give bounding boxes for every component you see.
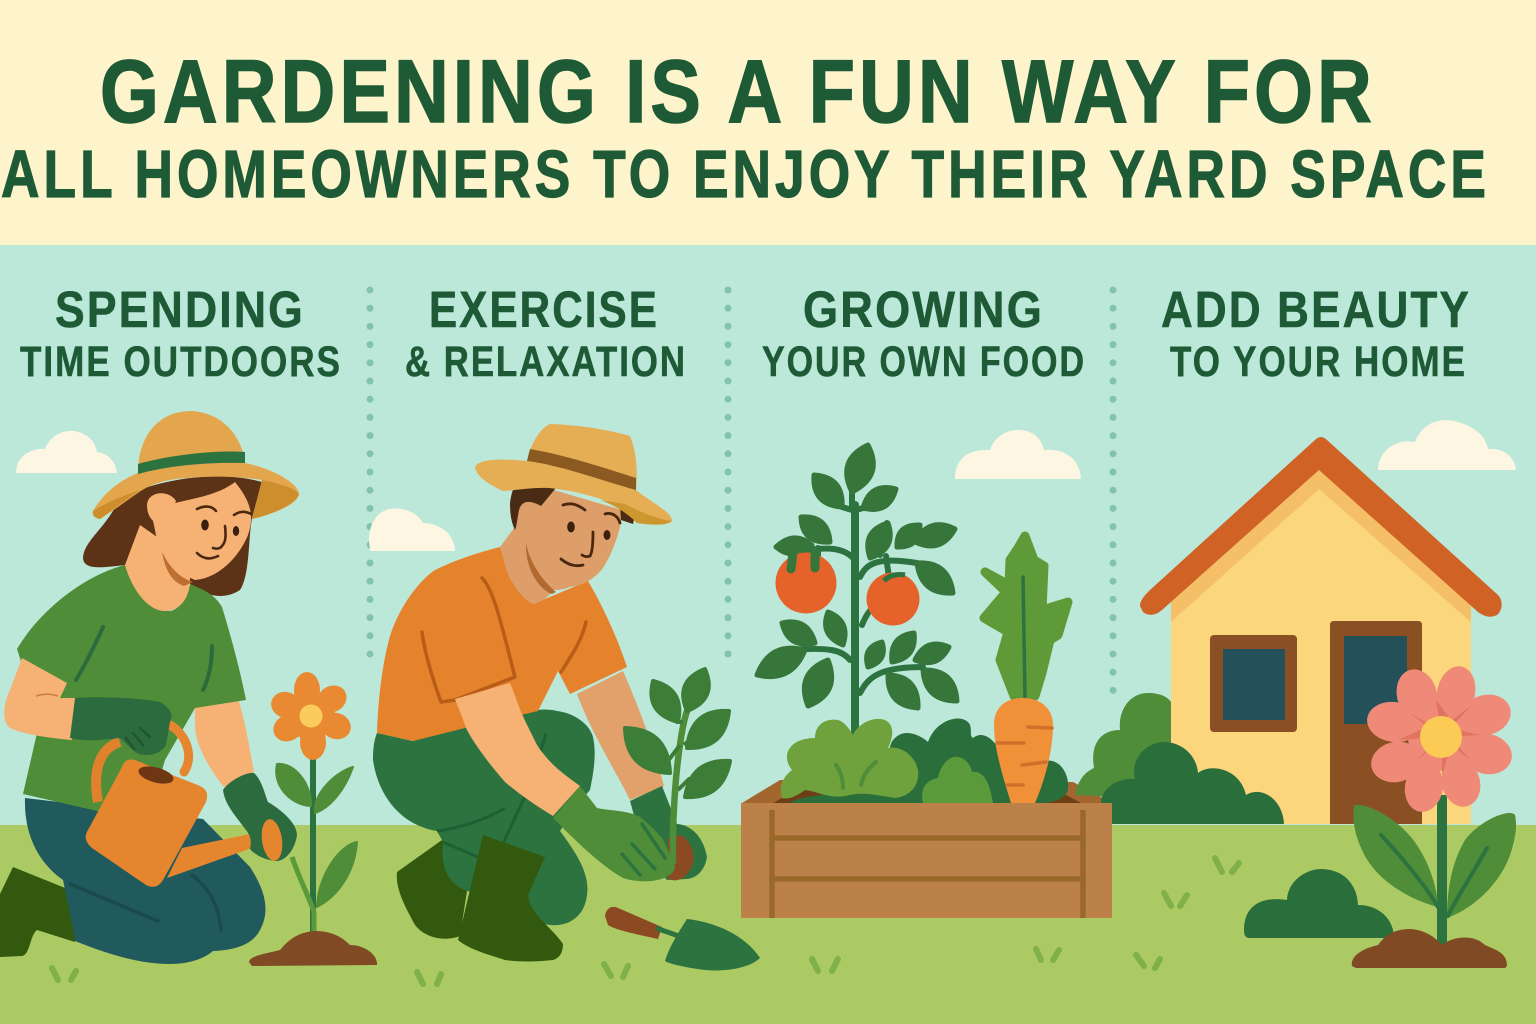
heading: add beauty to your home: ADD BEAUTY — [1161, 281, 1471, 338]
neck — [500, 520, 590, 604]
stem — [1437, 795, 1447, 945]
heading: spending time outdoors: SPENDING — [55, 281, 305, 338]
small lettuce — [922, 757, 993, 803]
heading: growing your own food: GROWING — [803, 281, 1044, 338]
hat band — [138, 452, 245, 474]
carrot — [984, 536, 1068, 803]
illustration: house — [1075, 437, 1502, 824]
shirt — [17, 565, 246, 811]
right leaf — [1447, 813, 1516, 918]
cloud 1 — [16, 431, 117, 473]
boot — [0, 867, 85, 957]
heading: growing your own food — [762, 281, 1086, 386]
heading: exercise and relaxation — [405, 281, 687, 386]
gable shading — [1171, 470, 1471, 622]
stem and branches — [790, 492, 923, 735]
watering can body — [86, 760, 207, 887]
heading: spending time outdoors: TIME OUTDOORS — [20, 338, 342, 386]
front boot — [458, 835, 563, 962]
tomatoes — [776, 552, 836, 614]
window — [1210, 635, 1297, 732]
facial features — [567, 522, 575, 532]
grass tufts — [52, 858, 1239, 984]
ear — [147, 493, 176, 524]
walls — [1171, 470, 1471, 824]
door — [1330, 621, 1422, 824]
window pane — [1223, 649, 1285, 720]
orange flower — [249, 672, 377, 966]
door pane — [1344, 636, 1407, 724]
front bush — [1101, 742, 1284, 824]
petals — [1364, 663, 1516, 815]
watering can handle — [168, 724, 189, 772]
pink flower — [1352, 663, 1516, 968]
trowel — [605, 907, 760, 970]
back glove — [630, 786, 707, 880]
back boot — [397, 840, 467, 939]
leaves — [276, 764, 311, 806]
front arm — [455, 683, 580, 816]
title banner — [0, 0, 1536, 245]
arm right — [195, 695, 254, 787]
stem — [310, 755, 316, 932]
heading: growing your own food: YOUR OWN FOOD — [762, 338, 1086, 386]
heading: exercise and relaxation: EXERCISE — [429, 281, 659, 338]
flower centre — [1420, 716, 1462, 758]
glove right hand — [223, 773, 297, 861]
head — [514, 486, 622, 587]
front glove — [553, 786, 675, 881]
crate front — [741, 803, 1112, 918]
heading: add beauty to your home: TO YOUR HOME — [1170, 338, 1467, 386]
back bush — [1075, 693, 1171, 800]
back arm — [577, 671, 664, 800]
watering can spout — [167, 832, 263, 878]
soil mound — [249, 931, 377, 966]
background ground — [0, 825, 1536, 1024]
flower centre — [300, 704, 322, 728]
soil mound — [1352, 929, 1507, 968]
straw hat — [475, 424, 672, 525]
illustration: raised garden bed — [742, 445, 1112, 805]
ground bush — [1244, 869, 1394, 938]
heading: exercise and relaxation: & RELAXATION — [405, 338, 687, 386]
heading: spending time outdoors — [20, 281, 342, 386]
petals — [268, 672, 355, 760]
left leaf — [1353, 805, 1438, 907]
illustration: woman gardener — [0, 411, 299, 964]
back handle — [96, 742, 120, 802]
hat band — [527, 449, 636, 490]
trousers — [25, 798, 265, 964]
cloud 3 — [955, 430, 1081, 479]
hair — [510, 480, 556, 530]
background sky — [0, 245, 1536, 826]
facial features — [201, 520, 209, 530]
illustration: man gardener — [373, 424, 760, 970]
trousers — [373, 710, 595, 925]
cloud 4 — [1378, 420, 1516, 470]
can opening — [137, 763, 175, 787]
crate interior — [742, 780, 1112, 803]
shirt — [377, 547, 627, 741]
dark lettuce — [888, 718, 1068, 803]
straw hat — [93, 411, 299, 519]
roof — [1140, 437, 1502, 617]
left arm — [4, 658, 78, 740]
heading: add beauty to your home — [1161, 281, 1471, 386]
glove left hand — [70, 697, 172, 755]
leaves — [757, 445, 957, 708]
cloud 2 — [369, 508, 455, 551]
light lettuce — [781, 719, 918, 798]
hair back — [83, 476, 262, 596]
neck — [125, 525, 190, 611]
seedling — [673, 711, 687, 862]
root ball — [667, 835, 694, 880]
face — [152, 482, 251, 580]
spout head — [259, 818, 285, 862]
tomato plant — [757, 445, 957, 735]
